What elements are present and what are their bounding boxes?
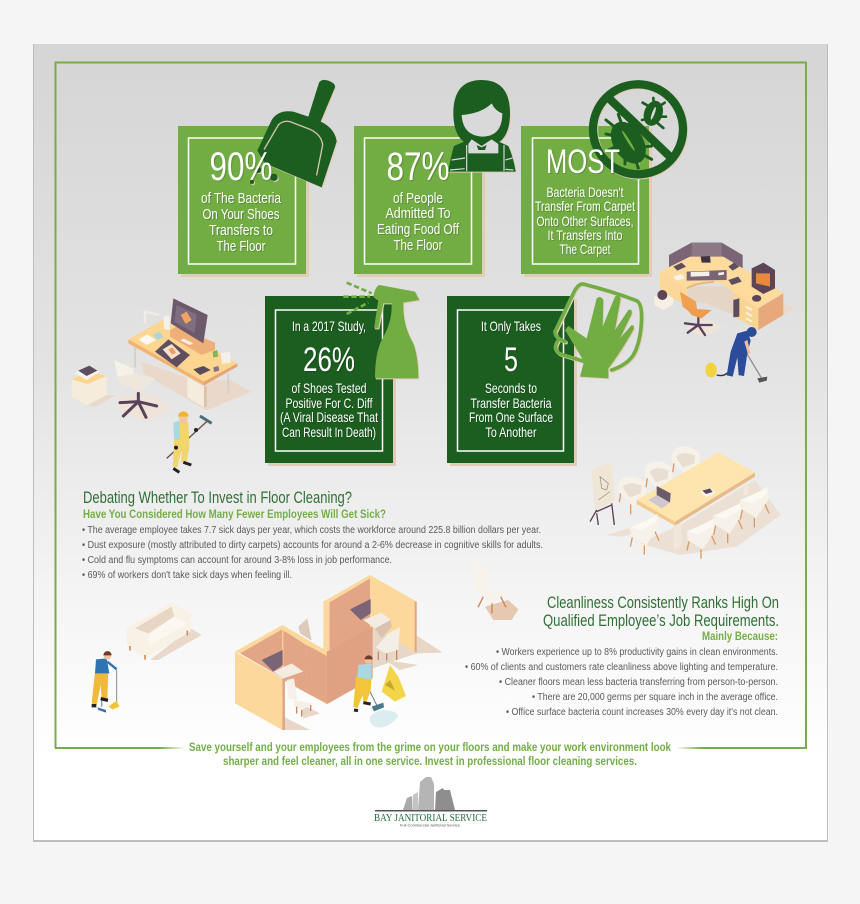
panel: 5 seconds stat: Seconds to bbox=[485, 380, 537, 396]
panel: 5 seconds stat: Transfer Bacteria bbox=[470, 395, 552, 411]
panel: 87 percent stat: 87% bbox=[386, 145, 450, 189]
panel: 5 seconds stat: To Another bbox=[486, 424, 537, 440]
green frame bbox=[55, 62, 807, 749]
panel: 87 percent stat: The Floor bbox=[394, 237, 442, 254]
text block: sick days section: • Dust exposure (mostly attributed to dirty carpets) accounts for around a 2-6% decrease in cognitive skills for adults. bbox=[82, 540, 543, 551]
text block: closing call to action: Save yourself and your employees from the grime on your floors and make your work environment look bbox=[189, 742, 672, 754]
text block: job requirements section: • Office surface bacteria count increases 30% every day it's not clean. bbox=[506, 707, 778, 718]
panel: 5 seconds stat: It Only Takes bbox=[481, 318, 541, 334]
text block: sick days section: • Cold and flu symptoms can account for around 3-8% loss in job performance. bbox=[82, 555, 392, 566]
panel: 90 percent stat: Transfers to bbox=[209, 222, 273, 239]
panel: most bacteria stat: It Transfers Into bbox=[548, 227, 623, 243]
text block: job requirements section: Cleanliness Consistently Ranks High On bbox=[547, 593, 779, 612]
panel: 87 percent stat: Eating Food Off bbox=[377, 221, 460, 238]
text block: job requirements section: • There are 20,000 germs per square inch in the average office. bbox=[532, 692, 778, 703]
panel: 5 seconds stat: 5 bbox=[504, 341, 518, 379]
text block: sick days section: • The average employee takes 7.7 sick days per year, which costs the workforce around 225.8 billion dollars per year. bbox=[82, 525, 541, 536]
panel: most bacteria stat: Onto Other Surfaces, bbox=[536, 213, 634, 229]
panel: 87 percent stat bbox=[354, 80, 516, 277]
icon: spray bottle bbox=[343, 283, 419, 378]
panel: most bacteria stat: The Carpet bbox=[560, 241, 611, 257]
panel: 26 percent stat: Can Result In Death) bbox=[282, 424, 376, 440]
illustration: corner desk with vacuuming cleaner on right bbox=[654, 243, 795, 383]
text block: job requirements section: • 60% of clients and customers rate cleanliness above lighting and temperature. bbox=[465, 662, 778, 673]
panel: 26 percent stat: 26% bbox=[303, 341, 355, 379]
text block: job requirements section: • Workers experience up to 8% productivity gains in clean environments. bbox=[496, 647, 778, 658]
icon: dustpan bbox=[250, 80, 337, 187]
text block: sick days section bbox=[82, 488, 543, 581]
text block: closing call to action bbox=[189, 742, 672, 768]
icon: glove bbox=[555, 284, 642, 378]
panel: 87 percent stat: of People bbox=[393, 190, 443, 207]
panel: most bacteria stat bbox=[521, 84, 683, 277]
illustration: chair above right text bbox=[473, 562, 518, 620]
panel: 26 percent stat bbox=[265, 283, 419, 466]
icon: woman cleaner bbox=[448, 80, 516, 172]
text block: sick days section: Have You Considered How Many Fewer Employees Will Get Sick? bbox=[83, 509, 386, 521]
panel: 26 percent stat: of Shoes Tested bbox=[292, 380, 366, 396]
logo: Bay Janitorial Service: Full Commercial Janitorial Service bbox=[400, 824, 460, 828]
logo: Bay Janitorial Service bbox=[374, 777, 487, 828]
panel: 26 percent stat: Positive For C. Diff bbox=[286, 395, 373, 411]
panel: 90 percent stat: of The Bacteria bbox=[201, 190, 282, 207]
text block: sick days section: • 69% of workers don't take sick days when feeling ill. bbox=[82, 570, 292, 581]
illustration: desk with monitor and cleaner on left bbox=[72, 298, 252, 472]
text block: closing call to action: sharper and feel cleaner, all in one service. Invest in professional floor cleaning services. bbox=[223, 756, 637, 768]
panel: 5 seconds stat bbox=[447, 284, 642, 466]
panel: 90 percent stat: The Floor bbox=[216, 238, 266, 255]
illustration: conference table bbox=[590, 446, 781, 559]
text block: job requirements section: Mainly Because: bbox=[702, 631, 778, 643]
panel: most bacteria stat: Bacteria Doesn't bbox=[546, 184, 624, 200]
panel: 26 percent stat: In a 2017 Study, bbox=[292, 318, 366, 334]
text block: job requirements section bbox=[465, 593, 779, 718]
panel: most bacteria stat: MOST bbox=[546, 143, 620, 181]
panel: 26 percent stat: (A Viral Disease That bbox=[280, 409, 378, 425]
panel: 90 percent stat bbox=[178, 80, 337, 277]
logo: Bay Janitorial Service: BAY JANITORIAL SERVICE bbox=[374, 813, 487, 824]
panel: 87 percent stat: Admitted To bbox=[386, 205, 450, 222]
panel: 5 seconds stat: From One Surface bbox=[469, 409, 553, 425]
text block: job requirements section: • Cleaner floors mean less bacteria transferring from person-to-person. bbox=[499, 677, 778, 688]
panel: 90 percent stat: 90% bbox=[210, 145, 272, 189]
illustration: sofa, cubicles and cleaners bbox=[92, 575, 443, 730]
text block: job requirements section: Qualified Employee’s Job Requirements. bbox=[543, 611, 779, 630]
panel: most bacteria stat: Transfer From Carpet bbox=[535, 198, 635, 214]
panel: 90 percent stat: On Your Shoes bbox=[202, 206, 280, 223]
text block: sick days section: Debating Whether To Invest in Floor Cleaning? bbox=[83, 488, 352, 507]
icon: no bacteria sign bbox=[593, 84, 683, 174]
